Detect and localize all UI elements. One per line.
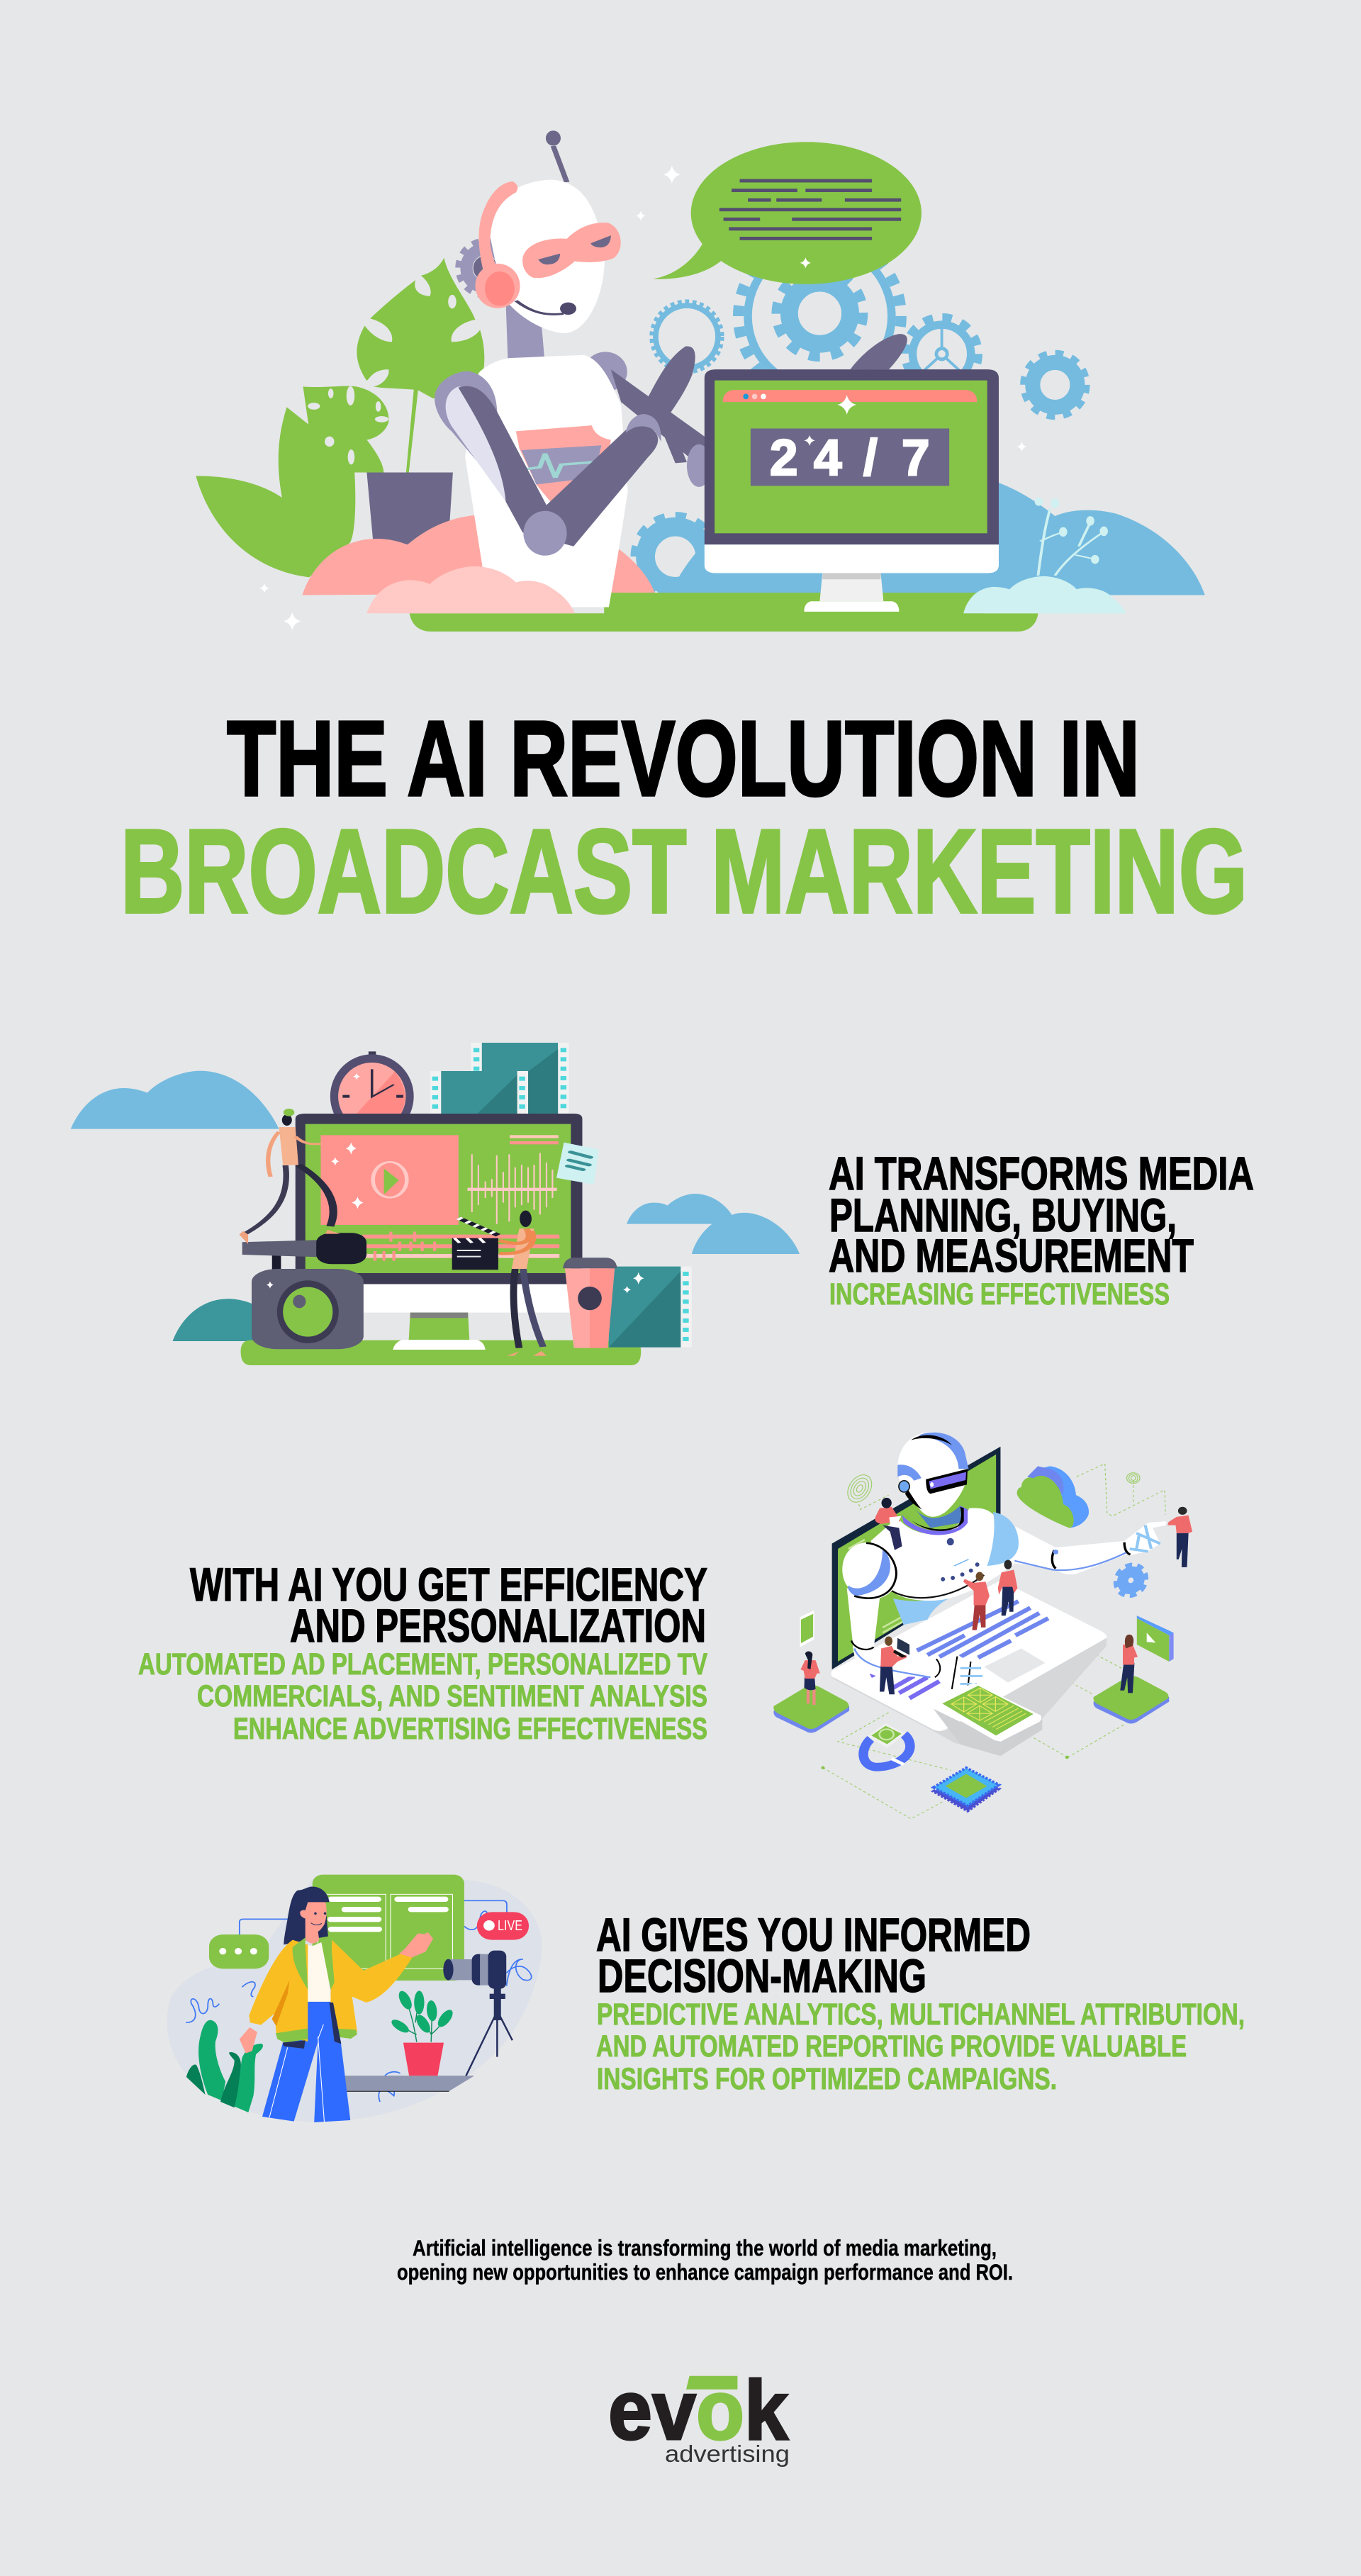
icon: video tile bbox=[1137, 1615, 1174, 1662]
icon: blue gears bbox=[634, 235, 1087, 598]
robot neck bbox=[506, 303, 544, 359]
robot antenna bbox=[546, 130, 567, 182]
section 2 text bbox=[138, 1559, 707, 1746]
face and neck bbox=[300, 1902, 327, 1944]
robot waist bbox=[893, 1588, 972, 1625]
robot headset bbox=[475, 181, 576, 315]
person with laptop bbox=[880, 1636, 909, 1694]
robot near arm bbox=[435, 371, 661, 556]
robot left arm bbox=[842, 1542, 982, 1691]
robot chest panel bbox=[516, 425, 611, 505]
plant: monstera leaf bbox=[357, 258, 484, 473]
robot bbox=[842, 1432, 1166, 1691]
icon: blue gear bbox=[1111, 1561, 1151, 1600]
teal hill bbox=[172, 1299, 253, 1341]
presenter bbox=[240, 1886, 433, 2122]
trousers bbox=[262, 2002, 350, 2122]
subheading: ENHANCE ADVERTISING EFFECTIVENESS bbox=[233, 1712, 707, 1746]
icon: fingerprint bbox=[843, 1472, 876, 1506]
standing person red trousers bbox=[963, 1572, 990, 1630]
header lines bbox=[510, 1135, 559, 1144]
closing statement: Artificial intelligence is transforming the world of media marketing, bbox=[413, 2235, 997, 2261]
robot torso bbox=[465, 355, 628, 607]
video panel bbox=[320, 1135, 459, 1225]
title bbox=[121, 698, 1248, 938]
browser bar bbox=[723, 390, 977, 402]
section 2 illustration: isometric AI robot and laptop bbox=[773, 1432, 1192, 1819]
desktop monitor bbox=[296, 1114, 582, 1350]
potted plant bbox=[389, 1989, 456, 2076]
robot torso bbox=[870, 1508, 1019, 1601]
24/7 panel bbox=[751, 428, 949, 486]
live label: LIVE bbox=[498, 1918, 522, 1934]
robot head bbox=[897, 1432, 968, 1517]
table bbox=[345, 2076, 474, 2091]
heading bbox=[190, 1559, 707, 1652]
logo tagline: advertising bbox=[665, 2441, 790, 2467]
left platform bbox=[773, 1685, 849, 1732]
robot chest details bbox=[892, 1538, 984, 1598]
dashed connectors bbox=[823, 1464, 1165, 1819]
green presentation board bbox=[313, 1875, 464, 1981]
icon: phone bbox=[800, 1611, 814, 1647]
cup bbox=[563, 1258, 692, 1348]
logo: evok advertising bbox=[608, 2363, 790, 2467]
section 1 text bbox=[829, 1148, 1254, 1311]
keyboard stripes bbox=[870, 1601, 1048, 1698]
woman on left platform bbox=[800, 1652, 820, 1705]
timeline tracks bbox=[362, 1232, 559, 1261]
heading: AI GIVES YOU INFORMED bbox=[596, 1909, 1031, 1961]
sticky note bbox=[556, 1143, 599, 1185]
audio waveform bbox=[467, 1153, 557, 1224]
robot far arm bbox=[584, 334, 907, 487]
icon: cloud bbox=[1017, 1466, 1089, 1528]
clapperboard bbox=[452, 1218, 498, 1270]
sparkles bbox=[259, 166, 1026, 630]
24/7 label: 24/7 bbox=[770, 430, 930, 486]
camera bbox=[252, 1269, 364, 1349]
pink back bush bbox=[303, 515, 655, 595]
jacket bbox=[249, 1937, 412, 2049]
man pointing bbox=[1167, 1507, 1192, 1567]
connector nodes bbox=[821, 1756, 1069, 1769]
hands bbox=[240, 1932, 433, 2054]
film strips top bbox=[430, 1043, 569, 1114]
chat bubble bbox=[209, 1934, 269, 1969]
section 3 illustration: presenter with camera bbox=[167, 1875, 542, 2122]
left plants bbox=[186, 2020, 263, 2112]
robot head bbox=[489, 180, 605, 333]
logo macron bbox=[686, 2376, 737, 2390]
right platform bbox=[1094, 1676, 1169, 1724]
laptop deck bbox=[831, 1580, 1107, 1731]
hero illustration: robot and 24/7 monitor bbox=[196, 130, 1205, 632]
woman on right platform bbox=[1120, 1635, 1138, 1693]
person on camera bbox=[239, 1109, 340, 1244]
standing person navy trousers bbox=[998, 1559, 1017, 1615]
camera handle bbox=[242, 1233, 366, 1271]
icon: clock bbox=[330, 1051, 414, 1138]
robot right shoulder bbox=[987, 1512, 1019, 1566]
live badge bbox=[477, 1912, 529, 1940]
icon: chip bbox=[934, 1768, 999, 1811]
icon: grey gear behind head bbox=[459, 241, 513, 295]
icon: wireless signal bbox=[1126, 1473, 1140, 1483]
robot bbox=[435, 130, 907, 607]
heading bbox=[596, 1909, 1031, 2002]
subheading: INCREASING EFFECTIVENESS bbox=[829, 1277, 1170, 1311]
subheading: AND AUTOMATED REPORTING PROVIDE VALUABLE bbox=[596, 2029, 1187, 2063]
subheading bbox=[596, 1998, 1245, 2096]
icon: smartwatch bbox=[863, 1723, 910, 1767]
hair bbox=[284, 1886, 330, 1944]
speech bubble bbox=[653, 142, 922, 284]
heading: DECISION-MAKING bbox=[598, 1950, 926, 2002]
laptop shadow bbox=[831, 1635, 1107, 1756]
connector lines and squiggles bbox=[186, 1900, 532, 2102]
speech bubble text lines bbox=[719, 179, 901, 240]
monitor bbox=[705, 369, 999, 612]
heading: WITH AI YOU GET EFFICIENCY bbox=[190, 1559, 707, 1611]
blue hills bbox=[655, 478, 1205, 595]
plant pot bbox=[366, 473, 453, 547]
people bbox=[800, 1498, 1192, 1705]
background blob bbox=[167, 1878, 542, 2122]
robot mask and eyes bbox=[522, 223, 621, 278]
closing statement bbox=[397, 2235, 1013, 2285]
trackpad bbox=[984, 1649, 1046, 1683]
tripod and camera bbox=[443, 1951, 513, 2076]
section 1 illustration: video production bbox=[71, 1043, 800, 1365]
laptop screen bbox=[832, 1447, 1000, 1669]
green ground base bbox=[410, 593, 1038, 632]
small bush bbox=[963, 576, 1126, 613]
person sitting on screen bbox=[875, 1498, 902, 1550]
front pink bush bbox=[366, 566, 575, 613]
heading: PLANNING, BUYING, bbox=[829, 1189, 1177, 1241]
subheading bbox=[138, 1647, 707, 1746]
tablet bbox=[934, 1683, 1042, 1756]
shirt bbox=[304, 1941, 331, 2001]
section 3 text bbox=[596, 1909, 1245, 2096]
person with clapperboard bbox=[499, 1211, 547, 1356]
platforms bbox=[773, 1676, 1169, 1732]
heading bbox=[829, 1148, 1254, 1282]
robot right arm bbox=[1014, 1521, 1166, 1574]
logo wordmark: evok bbox=[608, 2363, 789, 2458]
subheading: INSIGHTS FOR OPTIMIZED CAMPAIGNS. bbox=[597, 2062, 1057, 2096]
closing statement: opening new opportunities to enhance campaign performance and ROI. bbox=[397, 2259, 1013, 2285]
plant: lower leaves bbox=[196, 386, 388, 577]
subheading: AUTOMATED AD PLACEMENT, PERSONALIZED TV bbox=[138, 1647, 707, 1681]
twig plant bbox=[1035, 498, 1108, 576]
heading: AND MEASUREMENT bbox=[829, 1230, 1194, 1282]
subheading: COMMERCIALS, AND SENTIMENT ANALYSIS bbox=[197, 1679, 707, 1713]
heading: AI TRANSFORMS MEDIA bbox=[829, 1148, 1254, 1199]
heading: AND PERSONALIZATION bbox=[290, 1600, 706, 1652]
robot collar and neck bbox=[902, 1506, 968, 1535]
clouds bbox=[71, 1071, 800, 1254]
green ground bbox=[241, 1340, 641, 1365]
